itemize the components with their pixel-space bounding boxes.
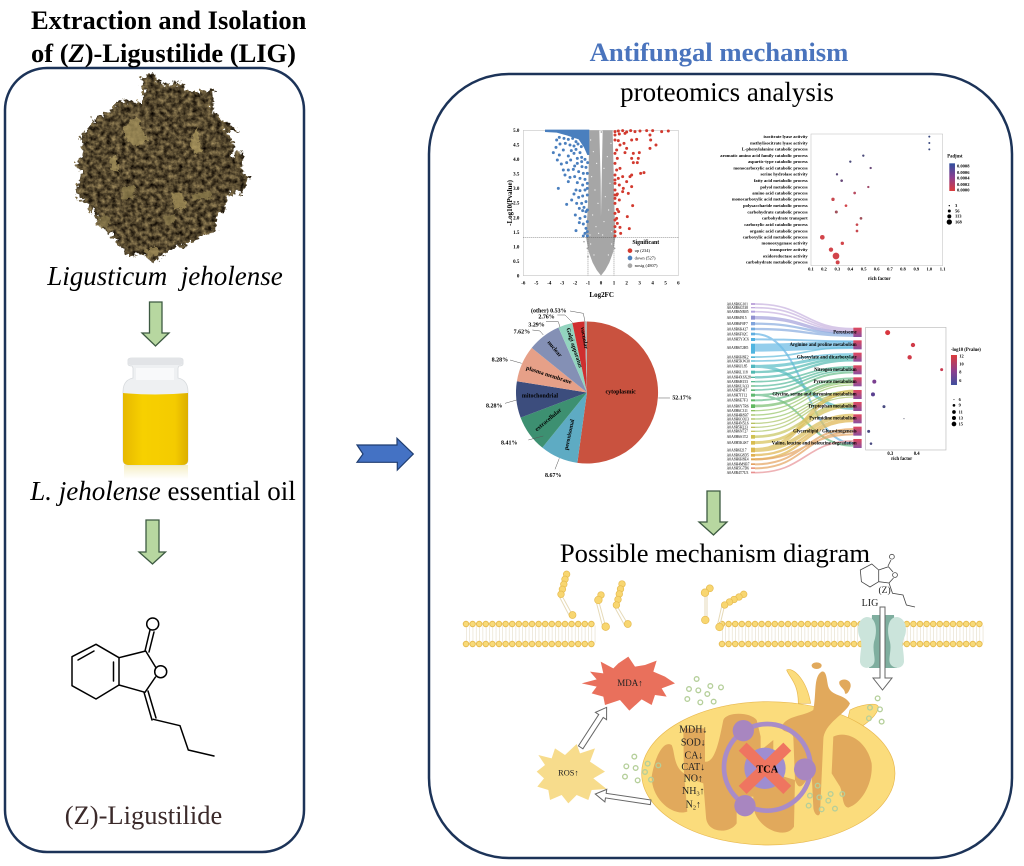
percent labels: 8.28% (486, 404, 502, 410)
slice labels: extracellular (534, 407, 563, 433)
protein labels: A0A8H6F0F7 (727, 322, 748, 326)
diagram: membrane channel (858, 615, 906, 668)
source nodes (751, 303, 755, 473)
bubble dots (867, 330, 943, 445)
x axis labels: 3 (638, 282, 641, 287)
pathway labels: Peroxisome (833, 331, 857, 336)
title: extraction and isolation: of (Z)-Ligustilide (LIG) (31, 38, 296, 68)
arrow: blue connector (357, 438, 413, 470)
legend (628, 240, 659, 268)
legend pvalue: 8 (959, 370, 962, 375)
legend size: 15 (959, 421, 963, 426)
enzyme changes: 2 (693, 804, 696, 811)
protein labels: A0A8B6G8D5 (727, 453, 749, 457)
percent labels: 7.62% (514, 329, 530, 335)
legend padjust (947, 154, 970, 193)
arrow: oil to compound (139, 520, 166, 564)
y axis labels: 1.0 (513, 245, 520, 250)
axis title: rich factor (868, 277, 891, 282)
slice labels (522, 327, 636, 451)
x axis labels: 6 (677, 282, 680, 287)
ticks and axis title (887, 452, 920, 462)
TCA label: TCA (756, 764, 779, 775)
protein labels (727, 302, 751, 475)
legend padjust: 0.0002 (957, 182, 970, 187)
y axis labels: 5.0 (513, 129, 520, 134)
percent labels: 3.29% (528, 322, 545, 328)
axis title x: Log2FC (589, 291, 614, 299)
x axis labels: 5 (664, 282, 667, 287)
y axis labels: 0 (517, 274, 520, 279)
percent labels: 8.41% (501, 441, 517, 447)
image: essential oil bottle (123, 358, 188, 479)
ticks: 0.1 (808, 267, 815, 272)
GO term labels: oxidoreductase activity (763, 253, 808, 258)
sankey ribbons (755, 304, 853, 473)
TCA cycle ring (724, 720, 816, 816)
GO term labels: fatty acid metabolic process (754, 178, 808, 183)
slice labels: nuclear (546, 340, 563, 359)
x axis labels: -2 (573, 282, 578, 287)
GO term labels: carbohydrate catabolic process (747, 209, 808, 214)
x axis labels: -6 (521, 282, 526, 287)
mitochondrion outer (642, 702, 895, 845)
pathway labels: Tryptophan metabolism (808, 405, 857, 410)
protein labels: A0A8H5KW30 (727, 359, 750, 363)
protein labels: A0A8H6O3U3 (727, 417, 749, 421)
protein labels: A0A8H6L118 (727, 370, 748, 374)
protein labels: A0A8B5H223 (727, 426, 748, 430)
protein labels: A0A8H4R8B7 (727, 413, 749, 417)
percent labels: 8.28% (492, 357, 508, 363)
enzyme changes: NO↑ (684, 774, 703, 785)
GO term labels: L-phenylalanine catabolic process (742, 147, 808, 152)
caption: Ligusticum jeholense: Ligusticum jeholense (46, 261, 283, 291)
legend padjust: 0.0000 (957, 188, 970, 193)
protein labels: A0A8H7IT12 (727, 393, 747, 397)
label: Z: (Z) (879, 585, 891, 596)
enzyme changes: 3 (696, 791, 700, 798)
pathway labels: Glycine, serine and threonine metabolism (772, 393, 857, 398)
protein labels: A0A8B6H153 (727, 380, 748, 384)
bead outlines (466, 624, 985, 644)
GO term labels: carbohydrate transport (762, 216, 808, 221)
protein labels: A0A8H5Y3C6 (727, 338, 749, 342)
ticks (808, 267, 946, 272)
ticks: 1.0 (926, 267, 933, 272)
legend pvalue (951, 348, 981, 385)
legend size: 168 (955, 219, 963, 224)
chart: GO enrichment bubble (720, 134, 970, 282)
slice labels: cytoplasmic (606, 390, 636, 396)
arrow: herb to oil (142, 302, 169, 346)
caption: ligustilide: (Z)-Ligustilide (65, 800, 222, 830)
protein labels: A0A8B6NB05 (727, 310, 749, 314)
x axis labels: -1 (586, 282, 591, 287)
image: dried Ligusticum jeholense (75, 72, 250, 263)
red up-regulated points (615, 131, 668, 236)
protein labels: A0A8B6G101 (727, 302, 748, 306)
protein labels: A0A8B6K427 (727, 327, 748, 331)
pathway labels: Pyrimidine metabolism (809, 417, 857, 422)
ticks: 0.8 (900, 267, 907, 272)
slice labels: peroxisomal (564, 419, 576, 451)
enzyme changes: ↑ (700, 786, 705, 797)
GO term labels: polyol metabolic process (760, 184, 808, 189)
y axis labels: 0.5 (513, 260, 520, 265)
x axis labels: 4 (651, 282, 654, 287)
legend pvalue: 6 (959, 378, 962, 383)
bead fill (466, 624, 985, 644)
enzyme changes: ↑ (696, 800, 701, 811)
legend padjust: 0.0008 (957, 163, 970, 168)
mitochondrion outer flares (787, 669, 878, 730)
pathway labels: Pyruvate metabolism (814, 380, 857, 385)
protein labels: A0A8H5P4J7 (727, 388, 747, 392)
diagram: cell membrane (466, 624, 985, 644)
legend size: 3 (955, 203, 958, 208)
slice labels: vacuolar (579, 327, 589, 350)
GO term labels: carboxylic acid catabolic process (744, 222, 808, 227)
caption: essential oil: L. jeholense essential oil (29, 476, 296, 506)
legend: nosig (4807) (635, 263, 658, 268)
protein labels: A0A8B6N727 (727, 430, 748, 434)
legend: Significant (632, 240, 659, 246)
chart: subcellular localization pie (486, 308, 692, 479)
pathway nodes (853, 328, 862, 448)
legend padjust: Padjust (947, 154, 963, 159)
enzyme changes: MDH↓ (679, 725, 707, 736)
legend pvalue: -log10 (Pvalue) (951, 348, 981, 353)
panel: antifungal mechanism (429, 74, 1012, 858)
protein labels: A0A8B6T2H5 (727, 346, 749, 350)
legend padjust: 0.0006 (957, 170, 970, 175)
slice labels: mitochondrial (522, 394, 558, 400)
GO term labels: aromatic amino acid family catabolic process (720, 153, 808, 158)
protein labels: A0A8H5K4S7 (727, 441, 749, 445)
GO term labels: transporter activity (770, 247, 808, 252)
enzyme changes: CA↓ (685, 750, 703, 761)
protein labels: A0A8B6Y7R6 (727, 404, 749, 408)
ticks and axis title: rich factor (891, 457, 912, 462)
GO term labels: carboxylic acid metabolic process (743, 235, 808, 240)
arrow: proteomics to diagram (699, 491, 727, 535)
ticks: 0.9 (913, 267, 920, 272)
protein labels: A0A8H6S1T2 (727, 435, 748, 439)
percent labels: 2.76% (538, 315, 555, 321)
legend padjust: 0.0004 (957, 176, 970, 181)
y axis labels: 3.0 (513, 187, 520, 192)
enzyme changes: NH (682, 786, 705, 798)
legend pvalue: 10 (959, 362, 964, 367)
title: extraction and isolation: Extraction and Isolation (31, 5, 307, 35)
y axis labels: 4.0 (513, 158, 520, 163)
axis title y: -Log10(Pvalue) (506, 179, 514, 226)
y axis labels: 2.5 (513, 202, 520, 207)
GO term labels: serine hydrolase activity (761, 172, 808, 177)
GO term labels: polysaccharide metabolic process (743, 203, 808, 208)
label: ROS: ROS↑ (558, 769, 579, 778)
enzyme changes: CAT↓ (681, 762, 705, 773)
pathway labels: Glyoxylate and dicarboxylate (797, 356, 857, 361)
x axis labels: -3 (560, 282, 565, 287)
GO term labels: organic acid catabolic process (750, 228, 808, 233)
pathway labels: Glycerolipid / Glucosinogenesis (793, 429, 857, 434)
GO term labels: carbohydrate metabolic process (746, 260, 808, 265)
ticks: 0.4 (847, 267, 854, 272)
bubble plot frame (866, 327, 946, 450)
protein labels: A0A8B6UA33 (727, 384, 749, 388)
ticks: 0.3 (834, 267, 841, 272)
x axis labels: 1 (613, 282, 616, 287)
blue down-regulated points (545, 130, 589, 236)
percent labels: 52.17% (672, 395, 692, 401)
heading: possible mechanism diagram: Possible mechanism diagram (560, 538, 870, 568)
GO term labels: monooxygenase activity (762, 241, 808, 246)
legend size: 56 (955, 208, 960, 213)
ticks: 0.2 (821, 267, 828, 272)
legend: up (234) (635, 248, 650, 253)
chemical structure: ligustilide (72, 618, 214, 756)
pathway labels (772, 331, 857, 447)
protein labels: A0A8B6I217 (727, 448, 747, 452)
cristae (652, 662, 872, 833)
GO term labels: amino acid catabolic process (752, 190, 808, 195)
GO term labels: monocarboxylic acid catabolic process (733, 165, 808, 170)
chart: KEGG sankey bubble (727, 302, 981, 475)
burst: MDA (582, 657, 675, 711)
y axis labels: 4.5 (513, 144, 520, 149)
y axis labels (513, 129, 520, 279)
x axis labels: -5 (534, 282, 539, 287)
ticks: 0.7 (887, 267, 894, 272)
protein labels: A0A8B6E7F3 (727, 399, 748, 403)
legend size (947, 203, 963, 225)
slice labels: Golgi apparatus (564, 327, 583, 369)
vesicles (623, 677, 884, 812)
legend size: 6 (959, 397, 962, 402)
percent labels (486, 308, 692, 479)
protein labels: A0A8B6F02C (727, 332, 749, 336)
pathway labels: Arginine and proline metabolism (790, 343, 857, 348)
slice labels: plasma membrane (525, 366, 572, 386)
percent labels: 8.67% (545, 473, 561, 479)
x axis labels: 0 (600, 282, 603, 287)
protein labels: A0A8H6H8E4 (727, 458, 749, 462)
panel: extraction (5, 68, 304, 852)
membrane tails (466, 626, 985, 642)
small ligustilide structure (860, 554, 915, 607)
ticks: 0.6 (874, 267, 880, 272)
legend pvalue: 12 (959, 353, 964, 358)
ticks and axis title: 0.4 (914, 452, 920, 457)
protein labels: A0A8H4N5L6 (727, 422, 749, 426)
heading: antifungal mechanism: Antifungal mechanism (590, 37, 848, 67)
GO term labels (720, 134, 808, 265)
protein labels: A0A8H6JL85 (727, 365, 748, 369)
ticks and axis title: 0.3 (887, 452, 894, 457)
arrow: LIG through channel (873, 607, 892, 690)
enzyme changes: N (686, 800, 701, 811)
percent labels: (other) 0.53% (531, 308, 567, 315)
GO term labels: isocitrate lyase activity (763, 134, 808, 139)
gray non-significant points (584, 130, 615, 276)
arrow: mitochondrion to ROS (594, 788, 652, 809)
label: LIG: LIG (862, 598, 878, 609)
GO dots (820, 136, 930, 264)
protein labels: A0A8B4T7U3 (727, 471, 749, 475)
protein labels: A0A8H4M9B7 (727, 463, 750, 467)
x axis labels: -4 (547, 282, 552, 287)
GO term labels: monocarboxylic acid metabolic process (732, 197, 808, 202)
diagram: mitochondrion group (537, 657, 895, 845)
protein labels: A0A8B6G538 (727, 306, 748, 310)
heading: proteomics analysis: proteomics analysis (620, 77, 834, 107)
label: MDA: MDA↑ (617, 678, 643, 688)
threshold lines (523, 237, 678, 276)
protein labels: A0A8H4X6X28 (727, 376, 751, 380)
red cross (743, 747, 787, 790)
legend size: 11 (959, 409, 963, 414)
x axis labels: 2 (625, 282, 628, 287)
protein labels: A0A8H6H8E2 (727, 355, 749, 359)
legend: down (527) (635, 255, 656, 260)
protein labels: A0A8H5G7D6 (727, 467, 749, 471)
y axis labels: 3.5 (513, 173, 520, 178)
protein labels: A0A8B6I915 (727, 316, 747, 320)
ticks: 1.1 (940, 267, 946, 272)
diagram: free lipids (558, 571, 747, 631)
burst: ROS (537, 744, 607, 803)
y axis labels: 2.0 (513, 216, 520, 221)
GO term labels: aspartic-type catabolic process (748, 159, 808, 164)
chart: volcano plot (506, 129, 680, 299)
legend size: 113 (955, 214, 962, 219)
protein labels: A0A8H6C311 (727, 409, 748, 413)
enzyme changes: SOD↓ (681, 738, 706, 749)
y axis labels: 1.5 (513, 231, 520, 236)
legend size (952, 397, 964, 426)
arrow: ROS to MDA (575, 704, 612, 751)
legend size: 9 (959, 403, 961, 408)
ticks: 0.5 (861, 267, 867, 272)
pathway labels: Valine, leucine and isoleucine degradation (772, 442, 857, 447)
legend size: 13 (959, 415, 964, 420)
x axis labels (521, 282, 680, 287)
GO term labels: methylisocitrate lyase activity (750, 140, 808, 145)
pathway labels: Nitrogen metabolism (814, 368, 857, 373)
